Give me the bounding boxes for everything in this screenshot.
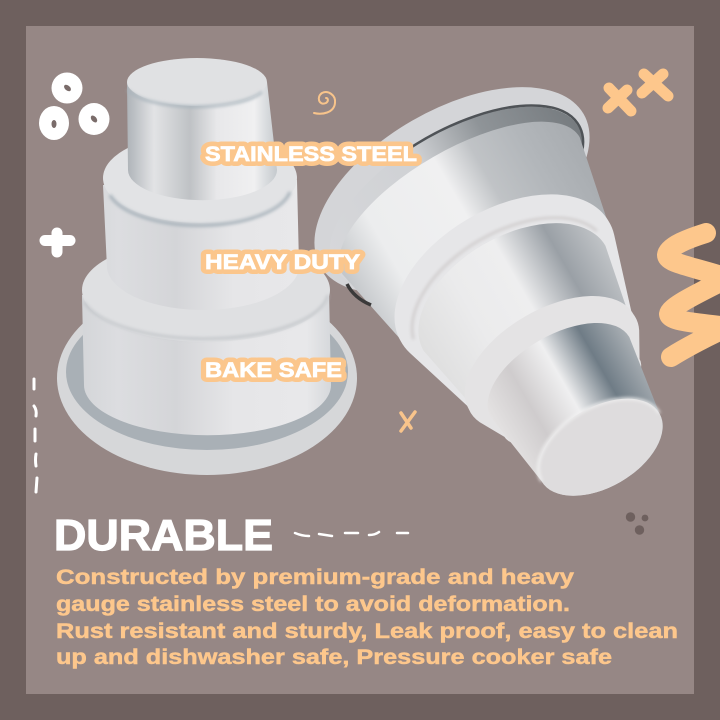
base of right pan — [522, 379, 679, 516]
description text: gauge stainless steel to avoid deformation. — [56, 592, 570, 616]
label: heavy duty: HEAVY DUTY — [205, 251, 360, 274]
left cake pan — [57, 58, 357, 475]
icon: three cereal loops — [39, 72, 110, 140]
vertical dashed line — [34, 379, 37, 492]
heading: DURABLE — [54, 512, 273, 560]
label: bake safe: BAKE SAFE — [205, 359, 342, 382]
brim of left pan — [57, 281, 357, 475]
dark gap under right pan rim — [347, 284, 371, 305]
label: bake safe: BAKE SAFE — [205, 359, 342, 382]
third tier of right pan — [443, 269, 669, 471]
description text: Rust resistant and sturdy, Leak proof, easy to clean — [56, 619, 678, 643]
horizontal dashed line — [295, 532, 408, 536]
description text — [56, 565, 678, 669]
icon: orange squiggle — [667, 233, 720, 357]
first tier of right pan — [314, 89, 658, 410]
top tier of left pan — [127, 82, 277, 200]
label: stainless steel: STAINLESS STEEL — [205, 143, 417, 166]
label: heavy duty: HEAVY DUTY — [205, 251, 360, 274]
second tier of right pan — [365, 159, 681, 467]
description text: Constructed by premium-grade and heavy — [56, 565, 574, 589]
icon: orange crosses — [608, 74, 668, 111]
bottom tier of left pan — [82, 290, 331, 435]
right cake pan — [280, 45, 720, 558]
rim of right pan — [280, 45, 624, 335]
icon: white plus — [45, 233, 70, 252]
middle tier of left pan — [103, 180, 299, 310]
icon: orange spiral — [314, 92, 335, 114]
icon: small orange x — [401, 412, 415, 431]
icon: three dark dots — [626, 512, 648, 535]
description text: up and dishwasher safe, Pressure cooker safe — [56, 645, 612, 669]
label: stainless steel: STAINLESS STEEL — [205, 143, 417, 166]
